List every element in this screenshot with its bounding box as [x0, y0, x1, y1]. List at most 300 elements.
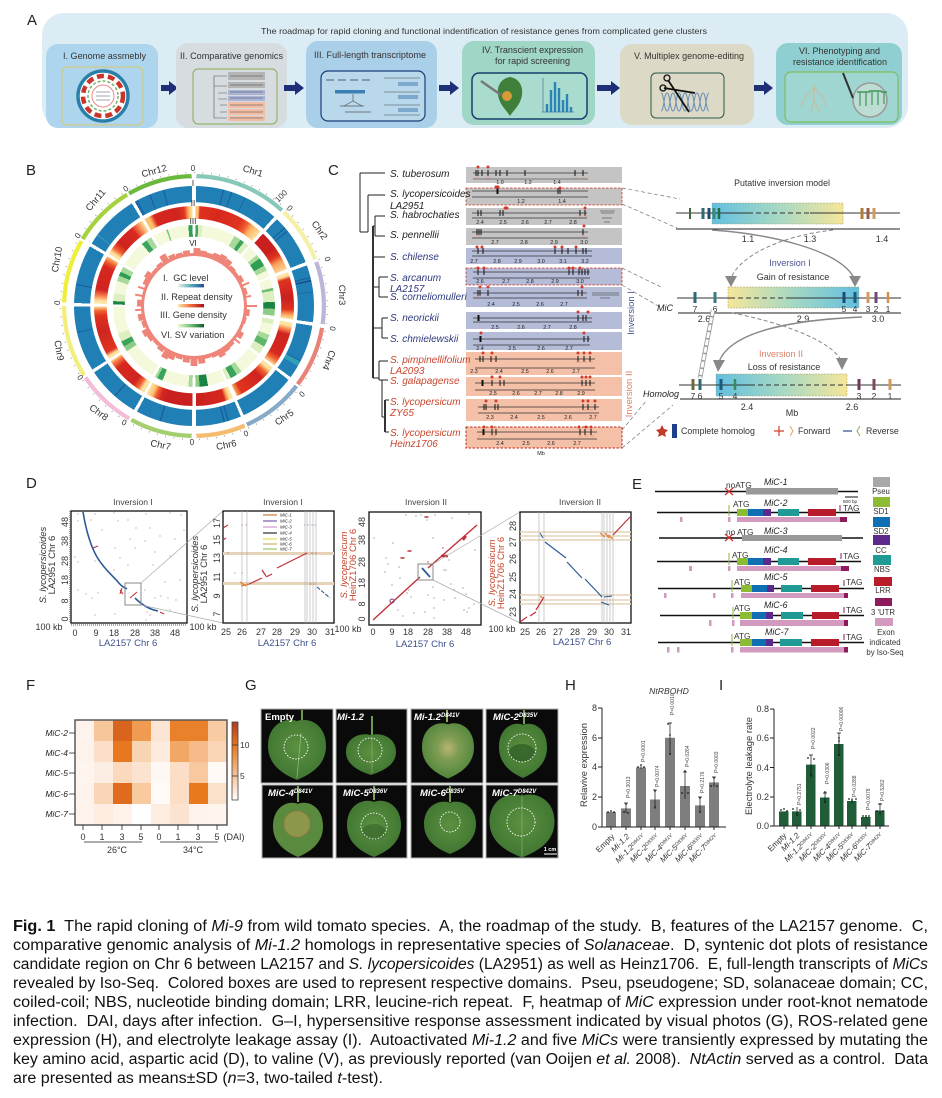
panel E: domain legend: Pseu	[872, 487, 890, 496]
MiC-7: TAG	[846, 632, 862, 642]
chromosome labels: 0	[53, 300, 62, 305]
chromosome labels: 0	[322, 256, 333, 263]
track 2: 2	[874, 304, 879, 314]
panel D: dot plot 1: S. lycopersicoides	[38, 526, 49, 603]
photo: MiC-6 D835V	[411, 785, 483, 858]
scale labels: 2.8	[569, 325, 577, 331]
p values: P=0.2751	[797, 783, 803, 805]
track 2: 5	[842, 304, 847, 314]
legend: MiC colours: MiC-3	[280, 524, 292, 530]
panel D: dot plot 3: S. lycopersicum	[339, 531, 350, 599]
scale labels: 2.5	[537, 415, 545, 421]
chromosome labels: 0	[297, 389, 307, 399]
MiC-6	[660, 600, 864, 626]
scale labels: 2.4	[496, 441, 504, 447]
y tick labels: 0.0	[756, 821, 769, 831]
panel D: dot plot 2: 17	[212, 518, 222, 528]
scale labels: 1.2	[524, 180, 532, 186]
MiC-1: noATG	[726, 480, 752, 490]
arrow: dashed inversion II	[732, 313, 848, 370]
scale labels: 2.4	[476, 346, 484, 352]
panel E: domain legend: indicated	[869, 638, 901, 647]
step III: full-length transcriptome	[306, 41, 437, 128]
panel C: species names: S. pennellii	[390, 230, 440, 241]
photo: MiC-2 D835V	[486, 709, 558, 783]
panel letter F: F	[26, 677, 35, 694]
MiC-7: MiC-7	[765, 627, 790, 637]
scale labels: 1.4	[553, 180, 561, 186]
panel D: dot plot 1: 9	[93, 628, 99, 638]
MiC-5: TAG	[846, 577, 862, 587]
zoom lines plot 3 to 4	[433, 512, 520, 623]
scale labels: 2.8	[493, 259, 501, 265]
figure caption: are presented as means±SD ( n=3, two-tailed t-test).	[13, 1070, 383, 1087]
Homolog label: Homolog	[643, 389, 679, 399]
chromosome labels: 0	[190, 438, 195, 447]
p values: P=0.5262	[880, 779, 886, 801]
track 2: 1	[886, 304, 891, 314]
track 3: 7	[691, 391, 696, 401]
step IV: transient expression: IV. Transcient expression	[482, 45, 583, 55]
panel G: leaf photos	[261, 709, 558, 858]
panel D: dot plot 3: 48	[461, 627, 471, 637]
legend: MiC colours: MiC-6	[280, 542, 292, 546]
scale labels: 2.7	[565, 346, 573, 352]
category labels: D836V	[840, 831, 855, 847]
chromosome labels: 0	[120, 418, 128, 428]
panel D: dot plot 2: 7	[212, 611, 222, 617]
MiC-6: TAG	[846, 605, 862, 615]
gene ticks	[476, 170, 595, 435]
column labels: 26°C	[107, 845, 128, 855]
chromosome labels: 0	[191, 164, 196, 173]
track 3: 5	[719, 391, 724, 401]
photo: Mi-1.2 D841V: Mi-1.2	[414, 712, 441, 723]
step VI: phenotyping: resistance identification	[793, 57, 887, 67]
scale labels: 2.8	[526, 279, 534, 285]
zoom lines plot 1 to 2	[141, 511, 223, 623]
step I: genome assembly	[46, 44, 158, 128]
panel E: domain legend	[866, 477, 904, 657]
panel E: domain legend: Exon	[877, 628, 895, 637]
panel C: species names: S. neorickii	[390, 313, 440, 324]
scale labels: 2.6	[537, 346, 545, 352]
MiC-2: MiC-2	[764, 498, 788, 508]
panel D: dot plot 2	[189, 497, 335, 649]
bars	[606, 738, 719, 827]
p values: P=0.0078	[866, 788, 872, 810]
forward marks	[475, 178, 594, 436]
panel D: dot plot 2: LA2157 Chr 6	[258, 638, 316, 649]
insets	[592, 211, 619, 298]
photo: Mi-1.2: Mi-1.2	[337, 712, 365, 723]
category labels: D842V	[703, 832, 718, 848]
panel H: NtRBOHD bar chart	[578, 686, 726, 865]
panel C: species names: S. lycopersicum	[390, 428, 461, 439]
panel C: species names: S. tuberosum	[390, 169, 449, 180]
panel E: domain legend: SD2	[873, 527, 889, 536]
panel D: dot plot 1	[35, 497, 187, 649]
chromosome labels: Chr5	[273, 408, 296, 428]
y tick labels: 0.6	[756, 733, 769, 743]
panel C: species names: S. chilense	[390, 252, 439, 263]
scale labels: 2.6	[517, 325, 525, 331]
MiC-3: MiC-3	[764, 526, 788, 536]
p values: P=0.0264	[685, 745, 691, 767]
scale labels: Mb	[537, 451, 545, 457]
photo: MiC-7 D842V: MiC-7	[492, 788, 518, 799]
panel C: gene tracks	[470, 167, 619, 457]
panel C: species names: LA2157	[390, 284, 425, 295]
MiC-3	[659, 526, 863, 541]
MiC-4	[657, 545, 861, 571]
chromosome labels: Chr7	[149, 438, 172, 453]
panel D: dot plot 1: 18	[60, 575, 70, 585]
panel D: dot plot 3: 9	[389, 627, 395, 637]
panel D: dot plot 4: 28	[570, 627, 580, 637]
track 3: 1	[888, 391, 893, 401]
panel D: dot plot 2: 28	[272, 627, 282, 637]
panel letter E: E	[632, 476, 642, 493]
red segments	[93, 546, 164, 614]
photo: MiC-7 D842V: D842V	[518, 789, 537, 795]
scale labels: 2.6	[512, 391, 520, 397]
legend: homolog marks	[656, 424, 899, 438]
category labels: Mi-1.2	[614, 843, 636, 865]
MiC-5	[658, 572, 864, 598]
y tick labels	[756, 704, 769, 831]
y tick labels: 0.8	[756, 704, 769, 714]
panel D: dot plot 4	[487, 497, 631, 648]
MiC-2: ATG	[733, 499, 749, 509]
panel D: dot plot 2: 31	[325, 627, 335, 637]
photo: Mi-1.2 D841V	[411, 709, 483, 783]
panel D: dot plot 4: 27	[553, 627, 563, 637]
MiC-4: TAG	[843, 551, 859, 561]
scale labels: 2.5	[491, 325, 499, 331]
panel E: domain legend: by Iso-Seq	[866, 648, 904, 657]
MiC-3: no ATG	[726, 527, 754, 537]
scale labels: 2.7	[560, 302, 568, 308]
chromosome labels: 0	[243, 428, 250, 439]
panel I: electrolyte leakage bar chart	[743, 704, 889, 864]
panel letter H: H	[565, 677, 576, 694]
heatmap cells	[75, 720, 227, 825]
panel D: dot plot 4: S. lycopersicum	[487, 539, 498, 607]
panel C: species names: S. chmielewskii	[390, 334, 459, 345]
panel D: dot plot 4: 100 kb	[488, 624, 516, 634]
chromosome labels: 0	[328, 325, 337, 332]
figure caption	[13, 918, 928, 1087]
y tick labels: 6	[592, 733, 597, 743]
panel D: dot plot 1: 38	[150, 628, 160, 638]
category labels: D841V	[827, 831, 842, 847]
chromosome labels: Chr9	[51, 339, 66, 362]
step VI: phenotyping	[776, 43, 902, 125]
scale labels: 2.4	[495, 369, 503, 375]
photo: Empty	[261, 709, 333, 783]
legend: ring key: I. GC level	[163, 273, 208, 283]
ring numerals: III	[190, 217, 196, 226]
MiC-7	[658, 627, 864, 652]
scale labels: 2.9	[551, 279, 559, 285]
arrow IV to V	[597, 81, 620, 95]
p values: P=0.0306	[825, 762, 831, 784]
scale labels: 3.2	[581, 259, 589, 265]
photo: Mi-1.2	[336, 709, 407, 783]
scale labels: 2.5	[521, 369, 529, 375]
column labels: 34°C	[183, 845, 204, 855]
scale labels: 3.1	[559, 259, 567, 265]
tree thick branches	[373, 226, 385, 432]
category labels: MiC-5	[658, 843, 680, 864]
panel E: domain legend: SD1	[873, 507, 889, 516]
scale labels: 2.4	[476, 220, 484, 226]
figure caption: comparative genomic analysis of Mi-1.2 homologs in representative species of Solanaceae . D, syntenic dot plots of resistance	[13, 937, 928, 954]
scale labels: 2.6	[476, 279, 484, 285]
panel letter A: A	[27, 12, 37, 29]
chromosome labels: Chr6	[215, 438, 238, 453]
step IV: transient expression: for rapid screening	[495, 56, 570, 66]
track 1	[676, 203, 900, 244]
legend: homolog marks: Reverse	[866, 426, 899, 436]
p values: P=0.0022	[811, 727, 817, 749]
colour scale: 10	[240, 740, 250, 750]
scale labels: 2.7	[470, 259, 478, 265]
gain of resistance caption: Gain of resistance	[757, 272, 829, 282]
panel D: dot plot 3: 28	[423, 627, 433, 637]
scale labels: 2.8	[569, 220, 577, 226]
scale labels: 2.3	[486, 415, 494, 421]
figure caption: coiled-coil; NBS, nucleotide binding domain; LRR, leucine-rich repeat. F, heatmap of MiC expression under root-knot nematode	[13, 994, 928, 1011]
legend: ring key	[160, 273, 233, 340]
figure caption: candidate region on Chr 6 between LA2157 and S. lycopersicoides (LA2951) as well as Heinz1706. E, full-length transcripts of MiCs	[13, 956, 928, 973]
ring numerals: I	[192, 179, 194, 188]
panel D: dot plot 3: 0	[370, 627, 376, 637]
arrow V to VI	[754, 81, 773, 95]
panel D: dot plot 3: HeinZ1706 Chr 6	[348, 529, 359, 601]
loss of resistance caption: Loss of resistance	[748, 362, 820, 372]
error bars	[797, 733, 882, 818]
category labels: MiC-4	[643, 843, 665, 864]
panel E: domain legend: 3 'UTR	[871, 608, 895, 617]
category labels: Mi-1.2	[609, 832, 632, 854]
colour scale: 5	[240, 771, 245, 781]
legend: MiC colours: MiC-7	[280, 546, 292, 552]
arrow: dashed inversion I	[725, 230, 833, 287]
photo: MiC-6 D835V: D835V	[446, 789, 465, 795]
data points	[608, 724, 717, 813]
y tick labels	[592, 703, 597, 832]
panel D: dot plot 2: 29	[290, 627, 300, 637]
panel C: inversion model	[643, 178, 901, 438]
panel letter I: I	[719, 677, 723, 694]
scale labels: 2.5	[522, 441, 530, 447]
category labels: D835V	[644, 832, 659, 848]
chromosome labels: Chr3	[336, 285, 347, 305]
panel D: dot plot 4: 25	[520, 627, 530, 637]
panel E: domain legend: LRR	[875, 586, 891, 595]
column labels: 0	[156, 832, 162, 842]
column labels	[80, 832, 244, 855]
panel D: dot plot 3: 38	[442, 627, 452, 637]
scale labels: 2.7	[572, 369, 580, 375]
row labels: MiC-6	[45, 789, 68, 799]
MiC-4: MiC-4	[764, 545, 788, 555]
step I: genome assembly: I. Genome assmebly	[63, 51, 146, 61]
panel D: dot plot 4: 27	[508, 537, 518, 547]
row labels: MiC-2	[45, 728, 68, 738]
scale labels: 2.3	[470, 369, 478, 375]
column labels: 5	[138, 832, 144, 842]
chromosome labels: Chr4	[319, 348, 337, 372]
panel C: phylogenetic tree	[360, 173, 389, 432]
step II: comparative genomics	[176, 43, 287, 128]
model title: Putative inversion model	[734, 178, 830, 188]
panel D: dot plot 1: Inversion I	[113, 497, 153, 507]
panel D: dot plot 2: LA2951 Chr 6	[199, 545, 210, 603]
scale labels: 1.0	[496, 180, 504, 186]
track 2: 2.9	[797, 314, 809, 324]
scale labels: 3.0	[580, 240, 588, 246]
track 3: 2	[872, 391, 877, 401]
row labels: MiC-4	[45, 748, 68, 758]
panel D: dot plot 4: 31	[621, 627, 631, 637]
panel D: dot plot 3: 28	[357, 557, 367, 567]
ring III: gene density	[113, 225, 275, 387]
star marks	[477, 167, 595, 427]
photo: MiC-2 D835V: MiC-2	[493, 712, 519, 723]
panel E: domain legend: CC	[875, 546, 887, 555]
scale labels: 2.7	[544, 220, 552, 226]
p values: P=0.2176	[700, 771, 706, 793]
figure caption: key amino acid, aspartic acid (D), to valine (V), as previously reported (van Ooijen et al. 2008). NtActin served as a control. Data	[13, 1051, 928, 1068]
colour scale	[232, 722, 250, 800]
y tick labels: 0.2	[756, 792, 769, 802]
scale labels: 2.6	[564, 415, 572, 421]
panel C: species bands	[466, 167, 622, 448]
photo: Empty: Empty	[265, 712, 295, 723]
MiC-6: MiC-6	[764, 600, 788, 610]
row labels	[45, 728, 68, 819]
scale labels: 2.6	[546, 369, 554, 375]
category labels	[766, 831, 885, 864]
track 3: 3	[857, 391, 862, 401]
step III: full-length transcriptome: III. Full-length transcriptome	[314, 50, 426, 60]
scale labels: 2.5	[499, 220, 507, 226]
p values: P=0.0001	[641, 740, 647, 762]
panel D: dot plot 3: Inversion II	[405, 497, 447, 507]
panel letter B: B	[26, 162, 36, 179]
panel letter G: G	[245, 677, 257, 694]
p values: P=0.0074	[655, 765, 661, 787]
panel D: dot plot 3: 8	[357, 601, 367, 607]
panel letter D: D	[26, 475, 37, 492]
panel D: dot plot 4: 24	[508, 589, 518, 599]
panel D: dot plot 4: LA2157 Chr 6	[553, 637, 611, 648]
panel A: roadmap	[42, 13, 908, 128]
arrow: solid inversion I	[712, 230, 861, 287]
panel D: dot plot 1: 18	[109, 628, 119, 638]
legend: MiC colours	[263, 512, 292, 552]
y axis title: Electrolyte leakage rate	[743, 717, 754, 815]
track 2: 4	[853, 304, 858, 314]
row labels: MiC-5	[45, 768, 68, 778]
p values	[797, 706, 886, 810]
scale labels: 3.0	[576, 279, 584, 285]
panel D: dot plot 4: 30	[604, 627, 614, 637]
panel D: dot plot 2: 15	[212, 535, 222, 545]
panel D: dot plot 2: 11	[212, 572, 222, 582]
column labels: 1	[175, 832, 181, 842]
category labels: D835V	[689, 832, 704, 848]
panel D: dot plot 1: 0	[60, 616, 70, 622]
Inversion II caption: Inversion II	[759, 349, 803, 359]
category labels: MiC-2	[628, 843, 650, 864]
category labels: D841V	[630, 832, 645, 848]
panel D: dot plot 1: 48	[60, 517, 70, 527]
category labels: Mi-1.2	[779, 831, 802, 853]
track 1: 1.3	[804, 234, 816, 244]
MiC-4: ATG	[732, 550, 748, 560]
roadmap background	[42, 13, 908, 128]
panel D: dot plot 3	[334, 497, 481, 650]
scale labels: 2.6	[547, 441, 555, 447]
chromosome labels: Chr12	[140, 163, 168, 180]
track 3	[679, 374, 901, 418]
panel D: dot plot 1: LA2157 Chr 6	[99, 638, 157, 649]
step II: comparative genomics: II. Comparative genomics	[180, 51, 283, 61]
panel D: dot plot 1: 100 kb	[35, 622, 63, 632]
bars	[779, 744, 884, 826]
panel D: dot plot 3: 38	[357, 535, 367, 545]
MiC-2: TAG	[843, 503, 859, 513]
y axis title: Relavive expression	[578, 723, 589, 807]
row labels: MiC-7	[45, 809, 68, 819]
scale labels: 2.9	[514, 259, 522, 265]
scale labels: 2.8	[555, 391, 563, 397]
track 3: 6	[698, 391, 703, 401]
photo: MiC-5 D836V: D836V	[369, 789, 388, 795]
panel D: dot plot 2: 27	[256, 627, 266, 637]
step IV: transient expression	[462, 41, 595, 125]
roadmap title: The roadmap for rapid cloning and functional indentification of resistance genes from complicated gene clusters	[261, 27, 707, 36]
ring: chromosome ideogram	[62, 174, 326, 438]
data points	[781, 738, 883, 816]
histogram VI: SV variation	[135, 248, 257, 366]
panel C: species names: Heinz1706	[390, 439, 438, 450]
scale labels: 2.7	[543, 325, 551, 331]
p values: P=0.00006	[839, 706, 845, 731]
photo: MiC-4 D841V: D841V	[294, 789, 313, 795]
panel D: dot plot 4: 28	[508, 521, 518, 531]
figure caption: revealed by Iso-Seq. Colored boxes are used to represent respective domains. Pseu, pseudogene; SD, solanaceae domain; CC,	[13, 975, 928, 992]
panel D: dot plot 1: 8	[60, 598, 70, 604]
track 2: 3	[866, 304, 871, 314]
step VI: phenotyping: VI. Phenotyping and	[799, 46, 880, 56]
photo: MiC-6 D835V: MiC-6	[420, 788, 446, 799]
category labels: MiC-4	[811, 842, 833, 863]
scale labels: 2.5	[508, 346, 516, 352]
track 3: 2.4	[741, 402, 753, 412]
column labels: 1	[99, 832, 105, 842]
MiC-5: MiC-5	[764, 572, 788, 582]
panel F: heatmap	[45, 720, 250, 855]
scale labels: 2.6	[521, 220, 529, 226]
zoom connectors from bands to model	[622, 188, 680, 448]
category labels	[594, 832, 720, 865]
chromosome labels: 100	[273, 188, 290, 204]
